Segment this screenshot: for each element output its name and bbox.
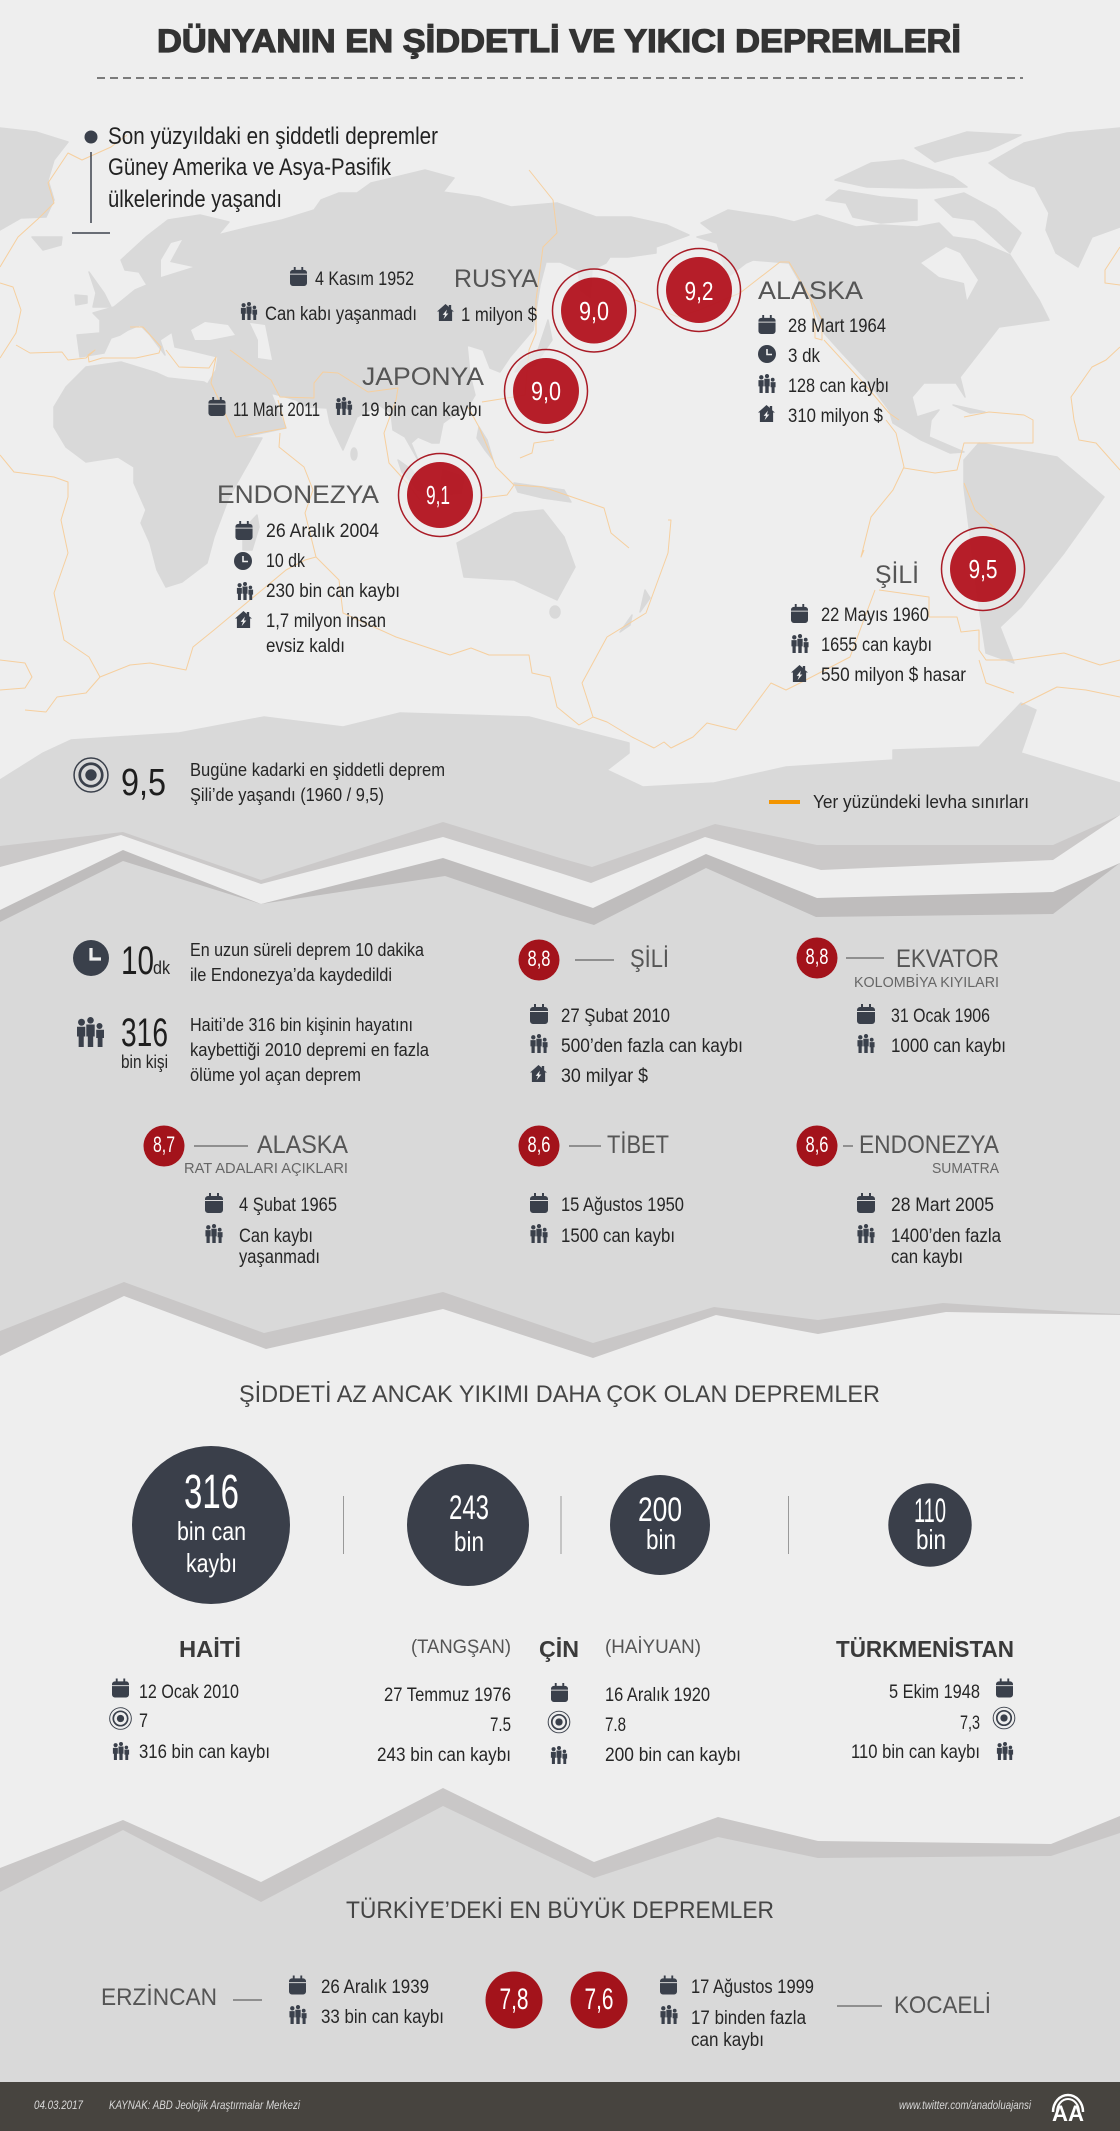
stat: longest quake: dk [153, 958, 171, 978]
bubble: 110 bin [888, 1483, 972, 1567]
quake card: Alaska 8,7: RAT ADALARI AÇIKLARI [184, 1160, 348, 1177]
intro text block: Güney Amerika ve Asya-Pasifik [108, 154, 392, 181]
footer: KAYNAK: ABD Jeolojik Araştırmalar Merkezi [109, 2098, 300, 2112]
details: Haiti [110, 1636, 270, 1763]
quake card: Ekvator 8,8: EKVATOR [896, 945, 999, 973]
quake card: Alaska 8,7: Can kaybı [239, 1226, 313, 1247]
details: Türkmenistan [836, 1636, 1015, 1763]
details: Çin: 16 Aralık 1920 [605, 1685, 710, 1706]
details: Çin [377, 1636, 741, 1766]
stat: strongest quake: Bugüne kadarki en şiddetli deprem [190, 760, 445, 780]
quake card: Endonezya 8,6: SUMATRA [932, 1160, 999, 1177]
quake: Kocaeli [570, 1972, 991, 2051]
quake: Şili: 550 milyon $ hasar [821, 665, 967, 686]
quake: Alaska [658, 248, 889, 427]
bubble: 316 bin: kaybı [186, 1548, 237, 1578]
quake card: Ekvator 8,8 [796, 938, 1006, 1057]
stat: deadliest quake: ölüme yol açan deprem [190, 1065, 361, 1085]
intro text block: Son yüzyıldaki en şiddetli depremler [108, 123, 438, 150]
quake card: Alaska 8,7 [144, 1126, 348, 1268]
quake: Japonya [208, 350, 587, 432]
quake: Endonezya: ENDONEZYA [217, 481, 379, 509]
details: Türkmenistan: TÜRKMENİSTAN [836, 1636, 1014, 1662]
bubble: 316 bin: 316 [184, 1466, 239, 1519]
stat: strongest quake: Şili’de yaşandı (1960 / 9,5) [190, 785, 384, 805]
footer: www.twitter.com/anadoluajansi [899, 2098, 1031, 2112]
quake card: Şili 8,8: 500’den fazla can kaybı [561, 1036, 743, 1057]
quake card: Şili 8,8: 8,8 [528, 946, 550, 971]
quake: Endonezya: 26 Aralık 2004 [266, 521, 379, 542]
stat: deadliest quake: Haiti’de 316 bin kişinin hayatını [190, 1015, 413, 1035]
quake: Kocaeli: KOCAELİ [894, 1992, 991, 2019]
quake card: Alaska 8,7: 8,7 [153, 1132, 175, 1157]
stat: strongest quake: 9,5 [121, 762, 166, 804]
bubble: 243 bin [407, 1464, 529, 1586]
quake card: Şili 8,8 [518, 940, 743, 1087]
bubble: 110 bin: 110 [914, 1492, 946, 1530]
zigzag divider: section 2 to section 3 [0, 1282, 1120, 2131]
quake card: Şili 8,8: 27 Şubat 2010 [561, 1006, 670, 1027]
quake card: Ekvator 8,8: 31 Ocak 1906 [891, 1006, 990, 1027]
bubble: 316 bin: bin can [177, 1516, 246, 1546]
stat: longest quake: ile Endonezya’da kaydedildi [190, 965, 392, 985]
quake: Japonya: 11 Mart 2011 [233, 400, 320, 421]
quake: Şili: ŞİLİ [875, 560, 919, 589]
quake: Şili: 22 Mayıs 1960 [821, 605, 929, 626]
bubble: 243 bin: 243 [449, 1489, 489, 1527]
quake: Rusya: 4 Kasım 1952 [315, 269, 414, 290]
quake card: Şili 8,8: 30 milyar $ [561, 1066, 648, 1087]
details: Haiti: HAİTİ [179, 1636, 241, 1662]
quake: Endonezya: 9,1 [426, 480, 450, 510]
quake: Şili: 9,5 [968, 554, 998, 584]
footer [0, 2082, 1120, 2131]
bubble: 200 bin [610, 1475, 710, 1575]
world map [0, 128, 1120, 900]
stat: deadliest quake [77, 1011, 430, 1085]
details: Türkmenistan: 7,3 [960, 1713, 980, 1734]
quake: Rusya: 9,0 [579, 296, 609, 326]
intro text block: ülkelerinde yaşandı [108, 186, 282, 213]
quake: Erzincan: 26 Aralık 1939 [321, 1977, 429, 1998]
quake: Alaska: 28 Mart 1964 [788, 316, 886, 337]
stat: longest quake: En uzun süreli deprem 10 dakika [190, 940, 425, 960]
quake card: Endonezya 8,6: 1400’den fazla [891, 1226, 1001, 1247]
quake: Endonezya: 10 dk [266, 551, 305, 572]
quake card: Tibet 8,6: TİBET [607, 1130, 669, 1159]
stat: deadliest quake: kaybettiği 2010 depremi en fazla [190, 1040, 430, 1060]
details: Türkmenistan: 5 Ekim 1948 [889, 1682, 980, 1703]
quake card: Ekvator 8,8: 1000 can kaybı [891, 1036, 1006, 1057]
quake card: Endonezya 8,6: 8,6 [806, 1132, 828, 1157]
details: Çin: 7.5 [490, 1715, 511, 1736]
zigzag divider: map to section 2 [0, 815, 1120, 2131]
quake card: Tibet 8,6: 8,6 [528, 1132, 550, 1157]
quake: Şili: 1655 can kaybı [821, 635, 932, 656]
details: Çin: 27 Temmuz 1976 [384, 1685, 511, 1706]
quake: Erzincan: 33 bin can kaybı [321, 2007, 444, 2028]
quake card: Tibet 8,6: 15 Ağustos 1950 [561, 1195, 684, 1216]
quake: Japonya: JAPONYA [362, 363, 484, 391]
quake: Alaska: 9,2 [684, 276, 714, 306]
stat: deadliest quake: bin kişi [121, 1052, 168, 1072]
quake: Erzincan: ERZİNCAN [101, 1984, 217, 2011]
logo: Anadolu Agency: AA [1052, 2101, 1084, 2126]
details: Çin: (TANGŞAN) [411, 1637, 511, 1658]
zigzag divider: section 3 to section 4 [0, 1788, 1120, 2131]
quake card: Alaska 8,7: 4 Şubat 1965 [239, 1195, 337, 1216]
quake: Endonezya [217, 454, 482, 657]
quake card: Şili 8,8: ŞİLİ [630, 944, 669, 973]
details: Haiti: 12 Ocak 2010 [139, 1682, 239, 1703]
section heading: Türkiye: TÜRKİYE’DEKİ EN BÜYÜK DEPREMLER [346, 1897, 774, 1924]
details: Haiti: 316 bin can kaybı [139, 1742, 270, 1763]
quake: Japonya: 19 bin can kaybı [361, 400, 482, 421]
quake: Endonezya: 230 bin can kaybı [266, 581, 400, 602]
details: Çin: ÇİN [539, 1636, 579, 1662]
bubble: 200 bin: 200 [638, 1491, 682, 1529]
details: Çin: 200 bin can kaybı [605, 1745, 741, 1766]
bubble: 316 bin [132, 1446, 290, 1604]
quake: Rusya [241, 265, 636, 352]
quake: Endonezya: evsiz kaldı [266, 636, 345, 657]
section heading: less severe but more destructive: ŞİDDETİ AZ ANCAK YIKIMI DAHA ÇOK OLAN DEPREMLER [239, 1381, 880, 1408]
quake: Kocaeli: 7,6 [584, 1983, 614, 2016]
stat: longest quake [73, 939, 425, 985]
details: Çin: 243 bin can kaybı [377, 1745, 511, 1766]
details: Çin: (HAİYUAN) [605, 1637, 701, 1658]
bubble: 200 bin: bin [646, 1524, 676, 1555]
title: DÜNYANIN EN ŞİDDETLİ VE YIKICI DEPREMLERİ [157, 23, 961, 59]
quake: Endonezya: 1,7 milyon insan [266, 611, 386, 632]
quake card: Ekvator 8,8: KOLOMBİYA KIYILARI [854, 973, 999, 991]
footer: 04.03.2017 [34, 2098, 84, 2112]
stat: strongest quake [74, 758, 445, 805]
bubble: 243 bin: bin [454, 1526, 484, 1557]
quake card: Alaska 8,7: yaşanmadı [239, 1247, 320, 1268]
quake: Kocaeli: can kaybı [691, 2030, 764, 2051]
quake card: Tibet 8,6 [518, 1126, 684, 1247]
quake: Alaska: ALASKA [758, 277, 863, 305]
quake card: Endonezya 8,6: 28 Mart 2005 [891, 1195, 994, 1216]
quake: Japonya: 9,0 [531, 376, 561, 406]
quake card: Endonezya 8,6: ENDONEZYA [859, 1131, 999, 1159]
details: Çin: 7.8 [605, 1715, 626, 1736]
quake: Erzincan [101, 1972, 542, 2028]
quake: Alaska: 3 dk [788, 346, 820, 367]
bubble: 110 bin: bin [916, 1524, 946, 1555]
quake: Alaska: 128 can kaybı [788, 376, 889, 397]
quake: Kocaeli: 17 binden fazla [691, 2008, 806, 2029]
quake card: Tibet 8,6: 1500 can kaybı [561, 1226, 675, 1247]
stat: deadliest quake: 316 [121, 1011, 168, 1055]
quake: Rusya: RUSYA [454, 265, 538, 293]
quake: Şili [791, 528, 1024, 686]
section 4 background [0, 1806, 1120, 2131]
quake card: Ekvator 8,8: 8,8 [806, 944, 828, 969]
quake card: Alaska 8,7: ALASKA [257, 1131, 348, 1159]
intro text block [72, 123, 438, 233]
details: Haiti: 7 [139, 1711, 148, 1732]
section 3 background [0, 1296, 1120, 2131]
section 2 background [0, 861, 1120, 2131]
quake card: Endonezya 8,6: can kaybı [891, 1247, 963, 1268]
legend: plate boundaries: Yer yüzündeki levha sınırları [813, 792, 1029, 812]
quake: Kocaeli: 17 Ağustos 1999 [691, 1977, 814, 1998]
quake: Alaska: 310 milyon $ [788, 406, 883, 427]
quake: Rusya: 1 milyon $ [461, 305, 537, 326]
details: Türkmenistan: 110 bin can kaybı [851, 1742, 980, 1763]
quake: Erzincan: 7,8 [500, 1983, 528, 2016]
quake: Rusya: Can kabı yaşanmadı [265, 304, 417, 325]
stat: longest quake: 10 [121, 939, 154, 983]
quake card: Endonezya 8,6 [796, 1126, 1001, 1268]
